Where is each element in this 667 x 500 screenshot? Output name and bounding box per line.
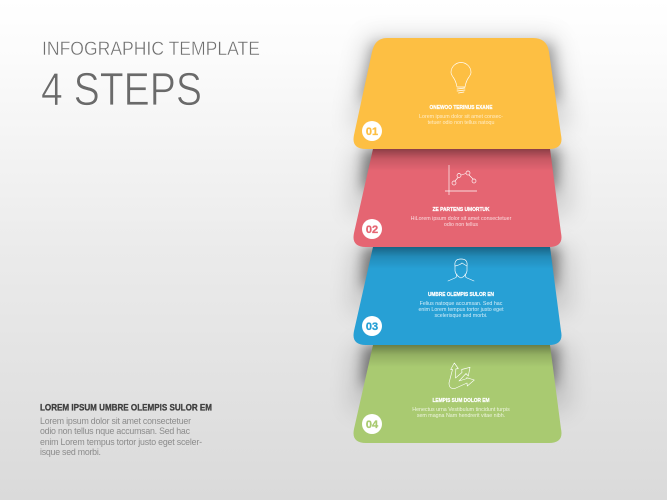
title: INFOGRAPHIC TEMPLATE (42, 38, 260, 60)
step 3 text: enim Lorem tempus tortor justo eget (418, 307, 504, 313)
icon: chart (445, 165, 477, 195)
step 4 text: Henectus urna Vestibulum tincidunt turpis (412, 407, 510, 413)
side paragraph: isque sed morbi. (40, 447, 101, 457)
icon: person (448, 259, 474, 281)
badge 03 (362, 316, 382, 336)
step 2 text: odio non tellus (444, 222, 478, 228)
step 2 text (411, 216, 512, 228)
icon: light bulb (451, 62, 471, 93)
title: 4 STEPS (41, 63, 202, 115)
step 4 text (412, 407, 510, 419)
step 3 text: Felius natoque accumsan. Sed hac (420, 301, 503, 307)
step 1 card (350, 36, 570, 149)
step 2 text: HiLorem ipsum dolor sit amet consectetuer (411, 216, 512, 222)
step 3 heading: UMBRE OLEMPIS SULOR EN (428, 292, 494, 298)
badge 03: 03 (366, 321, 378, 333)
step 3 text: scelerisque sed morbi. (434, 313, 488, 319)
badge 01: 01 (366, 126, 378, 138)
step 1 text (419, 114, 503, 126)
step 1 heading: ONEWOO TERINUS EXANE (430, 105, 493, 111)
badge 04 (362, 414, 382, 434)
badge 02: 02 (366, 224, 378, 236)
step 2 heading: ZE PARTENS UMORTUK (432, 207, 490, 213)
step 3 text (418, 301, 504, 319)
step 4 heading: LEMPIS SUM DOLOR EM (432, 398, 490, 404)
step 4 card (350, 345, 570, 443)
side paragraph (40, 416, 202, 457)
side heading: LOREM IPSUM UMBRE OLEMPIS SULOR EM (40, 402, 212, 412)
badge 04: 04 (366, 419, 379, 431)
badge 02 (362, 219, 382, 239)
step 2 card (350, 149, 570, 247)
icon: arrows (449, 363, 474, 388)
side paragraph: odio non tellus nque accumsan. Sed hac (40, 426, 191, 436)
side text block (40, 402, 212, 457)
step 3 card (350, 247, 570, 345)
step 1 text: tetuer odio non tellus natoqu (428, 120, 494, 126)
step 1 text: Lorem ipsum dolor sit amet consec- (419, 114, 503, 120)
side paragraph: Lorem ipsum dolor sit amet consectetuer (40, 416, 191, 426)
badge 01 (362, 121, 382, 141)
step 4 text: sem magna Nam hendrerit vitae nibh. (417, 413, 505, 419)
side paragraph: enim Lorem tempus tortor justo eget sceler- (40, 437, 202, 447)
title (41, 38, 260, 115)
